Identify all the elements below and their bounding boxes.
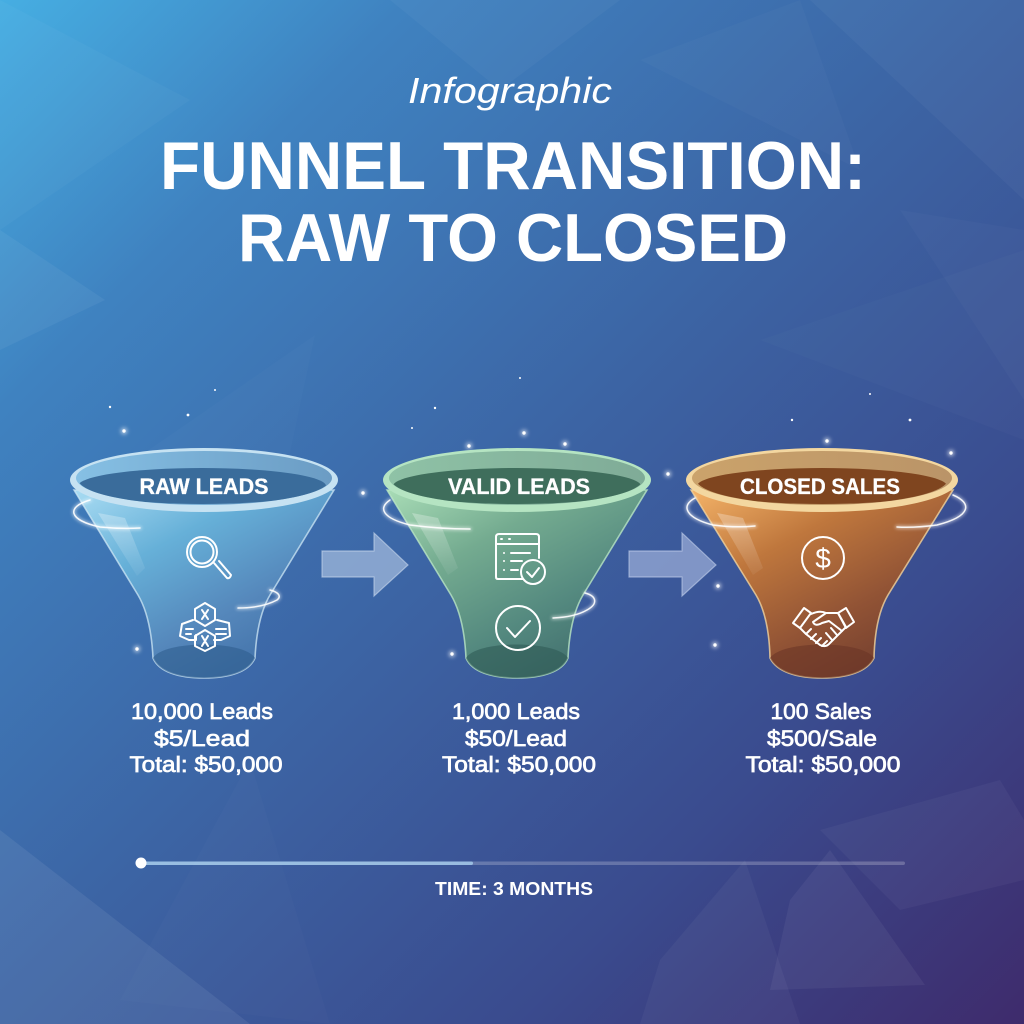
icon: checklist calendar xyxy=(496,534,545,584)
rim xyxy=(686,448,958,512)
stats: valid leads: $50/Lead xyxy=(465,726,567,751)
stats: raw leads: 10,000 Leads xyxy=(131,699,273,724)
funnel base xyxy=(466,644,568,678)
title: FUNNEL TRANSITION: xyxy=(160,128,866,204)
rim xyxy=(70,448,338,512)
rim xyxy=(383,448,651,512)
stats: closed sales xyxy=(746,699,900,777)
stats: valid leads: Total: $50,000 xyxy=(442,752,596,777)
glass highlight xyxy=(412,513,458,575)
icon: magnifying glass xyxy=(187,537,231,578)
funnel: raw leads xyxy=(70,448,338,678)
stats: closed sales: 100 Sales xyxy=(770,699,872,724)
funnel label: RAW LEADS xyxy=(140,474,268,499)
timeline xyxy=(136,858,905,868)
funnel label: CLOSED SALES xyxy=(740,474,900,499)
icon: dollar coin: $ xyxy=(815,543,831,574)
title xyxy=(160,128,866,276)
funnel base xyxy=(153,644,255,678)
stats: valid leads xyxy=(442,699,596,777)
funnel: valid leads xyxy=(383,448,651,678)
funnel: closed sales xyxy=(686,448,958,678)
funnel body xyxy=(74,490,334,678)
arrow: valid to closed xyxy=(629,533,716,596)
funnel label: VALID LEADS xyxy=(448,474,590,499)
arrow: raw to valid xyxy=(322,533,408,596)
stats: raw leads: Total: $50,000 xyxy=(130,752,282,777)
glass highlight xyxy=(717,513,763,575)
title: RAW TO CLOSED xyxy=(238,200,788,276)
glass highlight xyxy=(98,513,145,576)
icon: hexagon cluster xyxy=(180,603,230,651)
funnel base xyxy=(770,644,874,678)
stats: closed sales: Total: $50,000 xyxy=(746,752,900,777)
stats: raw leads: $5/Lead xyxy=(154,726,250,751)
icon: handshake xyxy=(793,608,854,646)
orbit rings xyxy=(74,495,966,618)
sparkles xyxy=(109,377,954,657)
subtitle: Infographic xyxy=(408,70,612,111)
icon: check circle xyxy=(496,606,540,650)
funnel body xyxy=(691,490,953,678)
icon: dollar coin xyxy=(802,537,844,579)
funnel body xyxy=(387,490,647,678)
stats: valid leads: 1,000 Leads xyxy=(452,699,580,724)
stats: closed sales: $500/Sale xyxy=(767,726,877,751)
timeline label: TIME: 3 MONTHS xyxy=(435,879,593,899)
stats: raw leads xyxy=(130,699,282,777)
